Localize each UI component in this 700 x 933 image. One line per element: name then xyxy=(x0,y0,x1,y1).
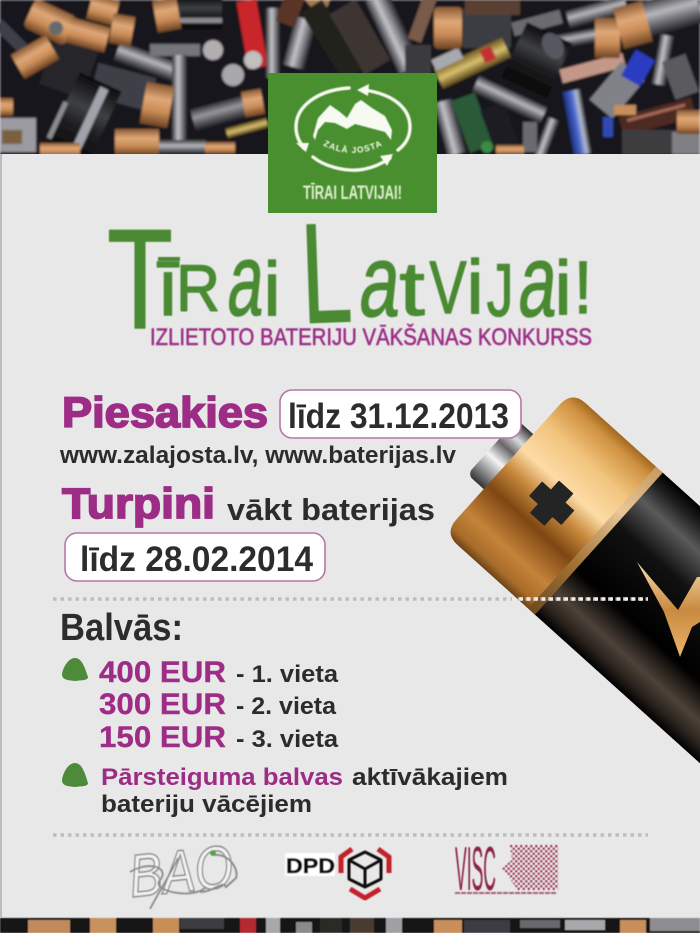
title: Tīrai Latvijai!: a xyxy=(223,224,271,338)
battery copper band xyxy=(528,467,663,615)
surprise prizes text: Pārsteiguma balvas xyxy=(101,764,343,791)
surprise prizes text: aktīvākajiem xyxy=(352,764,508,791)
prize list: 150 EUR xyxy=(99,721,226,754)
logo: DPD: DPD xyxy=(286,855,335,878)
date box: until 31.12.2013: līdz 31.12.2013 xyxy=(288,397,509,436)
title: Tīrai Latvijai! xyxy=(107,194,592,358)
title: Tīrai Latvijai!: a xyxy=(514,224,564,338)
prize list: - 3. vieta xyxy=(236,726,339,753)
heading: prizes: Balvās: xyxy=(60,607,183,649)
icon: plus sign xyxy=(529,480,574,526)
title: Tīrai Latvijai!: R xyxy=(176,253,220,326)
photo band: used batteries, top xyxy=(0,0,700,169)
surprise prizes text xyxy=(101,764,508,818)
title: Tīrai Latvijai!: i xyxy=(467,245,483,330)
prize list: - 2. vieta xyxy=(236,693,337,720)
icon: leaf bullet 2 xyxy=(62,763,88,787)
battery terminal xyxy=(470,424,534,490)
date box: until 28.02.2014: līdz 28.02.2014 xyxy=(80,540,314,579)
heading: Turpini: vākt baterijas xyxy=(227,492,435,527)
website links: www.zalajosta.lv, www.baterijas.lv xyxy=(59,442,457,469)
title: Tīrai Latvijai!: ! xyxy=(574,246,592,329)
logo: VISC: VISC xyxy=(455,835,496,904)
title: Tīrai Latvijai!: V xyxy=(429,246,467,329)
title: Tīrai Latvijai!: a xyxy=(355,224,407,338)
title: Tīrai Latvijai!: L xyxy=(298,194,354,354)
illustration: large battery xyxy=(450,397,700,764)
title: Tīrai Latvijai!: t xyxy=(399,246,425,331)
prize list: 400 EUR xyxy=(99,656,226,689)
heading: Piesakies: Piesakies xyxy=(62,389,268,437)
icon: leaf bullet 1 xyxy=(62,658,88,681)
icon: lightning bolt xyxy=(637,562,700,657)
heading: Turpini xyxy=(62,480,435,528)
logo: Zaļā josta green badge: ZALĀ JOSTA xyxy=(322,140,382,154)
photo band: used batteries, bottom xyxy=(0,918,700,933)
logo: BAO: BAO xyxy=(126,833,236,910)
title: Tīrai Latvijai!: ī xyxy=(157,243,179,332)
title: Tīrai Latvijai!: i xyxy=(555,246,571,331)
logo: DPD xyxy=(285,849,389,898)
surprise prizes text: bateriju vācējiem xyxy=(101,791,312,818)
title: Tīrai Latvijai!: J xyxy=(487,249,513,332)
battery copper cap xyxy=(444,391,663,615)
heading: Turpini: Turpini xyxy=(62,480,215,528)
prize list: 300 EUR xyxy=(99,688,226,721)
logo: Zaļā josta green badge: TĪRAI LATVIJAI! xyxy=(303,183,402,204)
prize list xyxy=(99,656,339,754)
logo: Zaļā josta green badge xyxy=(268,73,437,213)
title: Tīrai Latvijai!: i xyxy=(264,247,280,332)
battery black body xyxy=(533,471,700,781)
prize list: - 1. vieta xyxy=(236,661,339,688)
subtitle: IZLIETOTO BATERIJU VĀKŠANAS KONKURSS xyxy=(150,323,592,351)
title: Tīrai Latvijai!: T xyxy=(107,200,173,358)
